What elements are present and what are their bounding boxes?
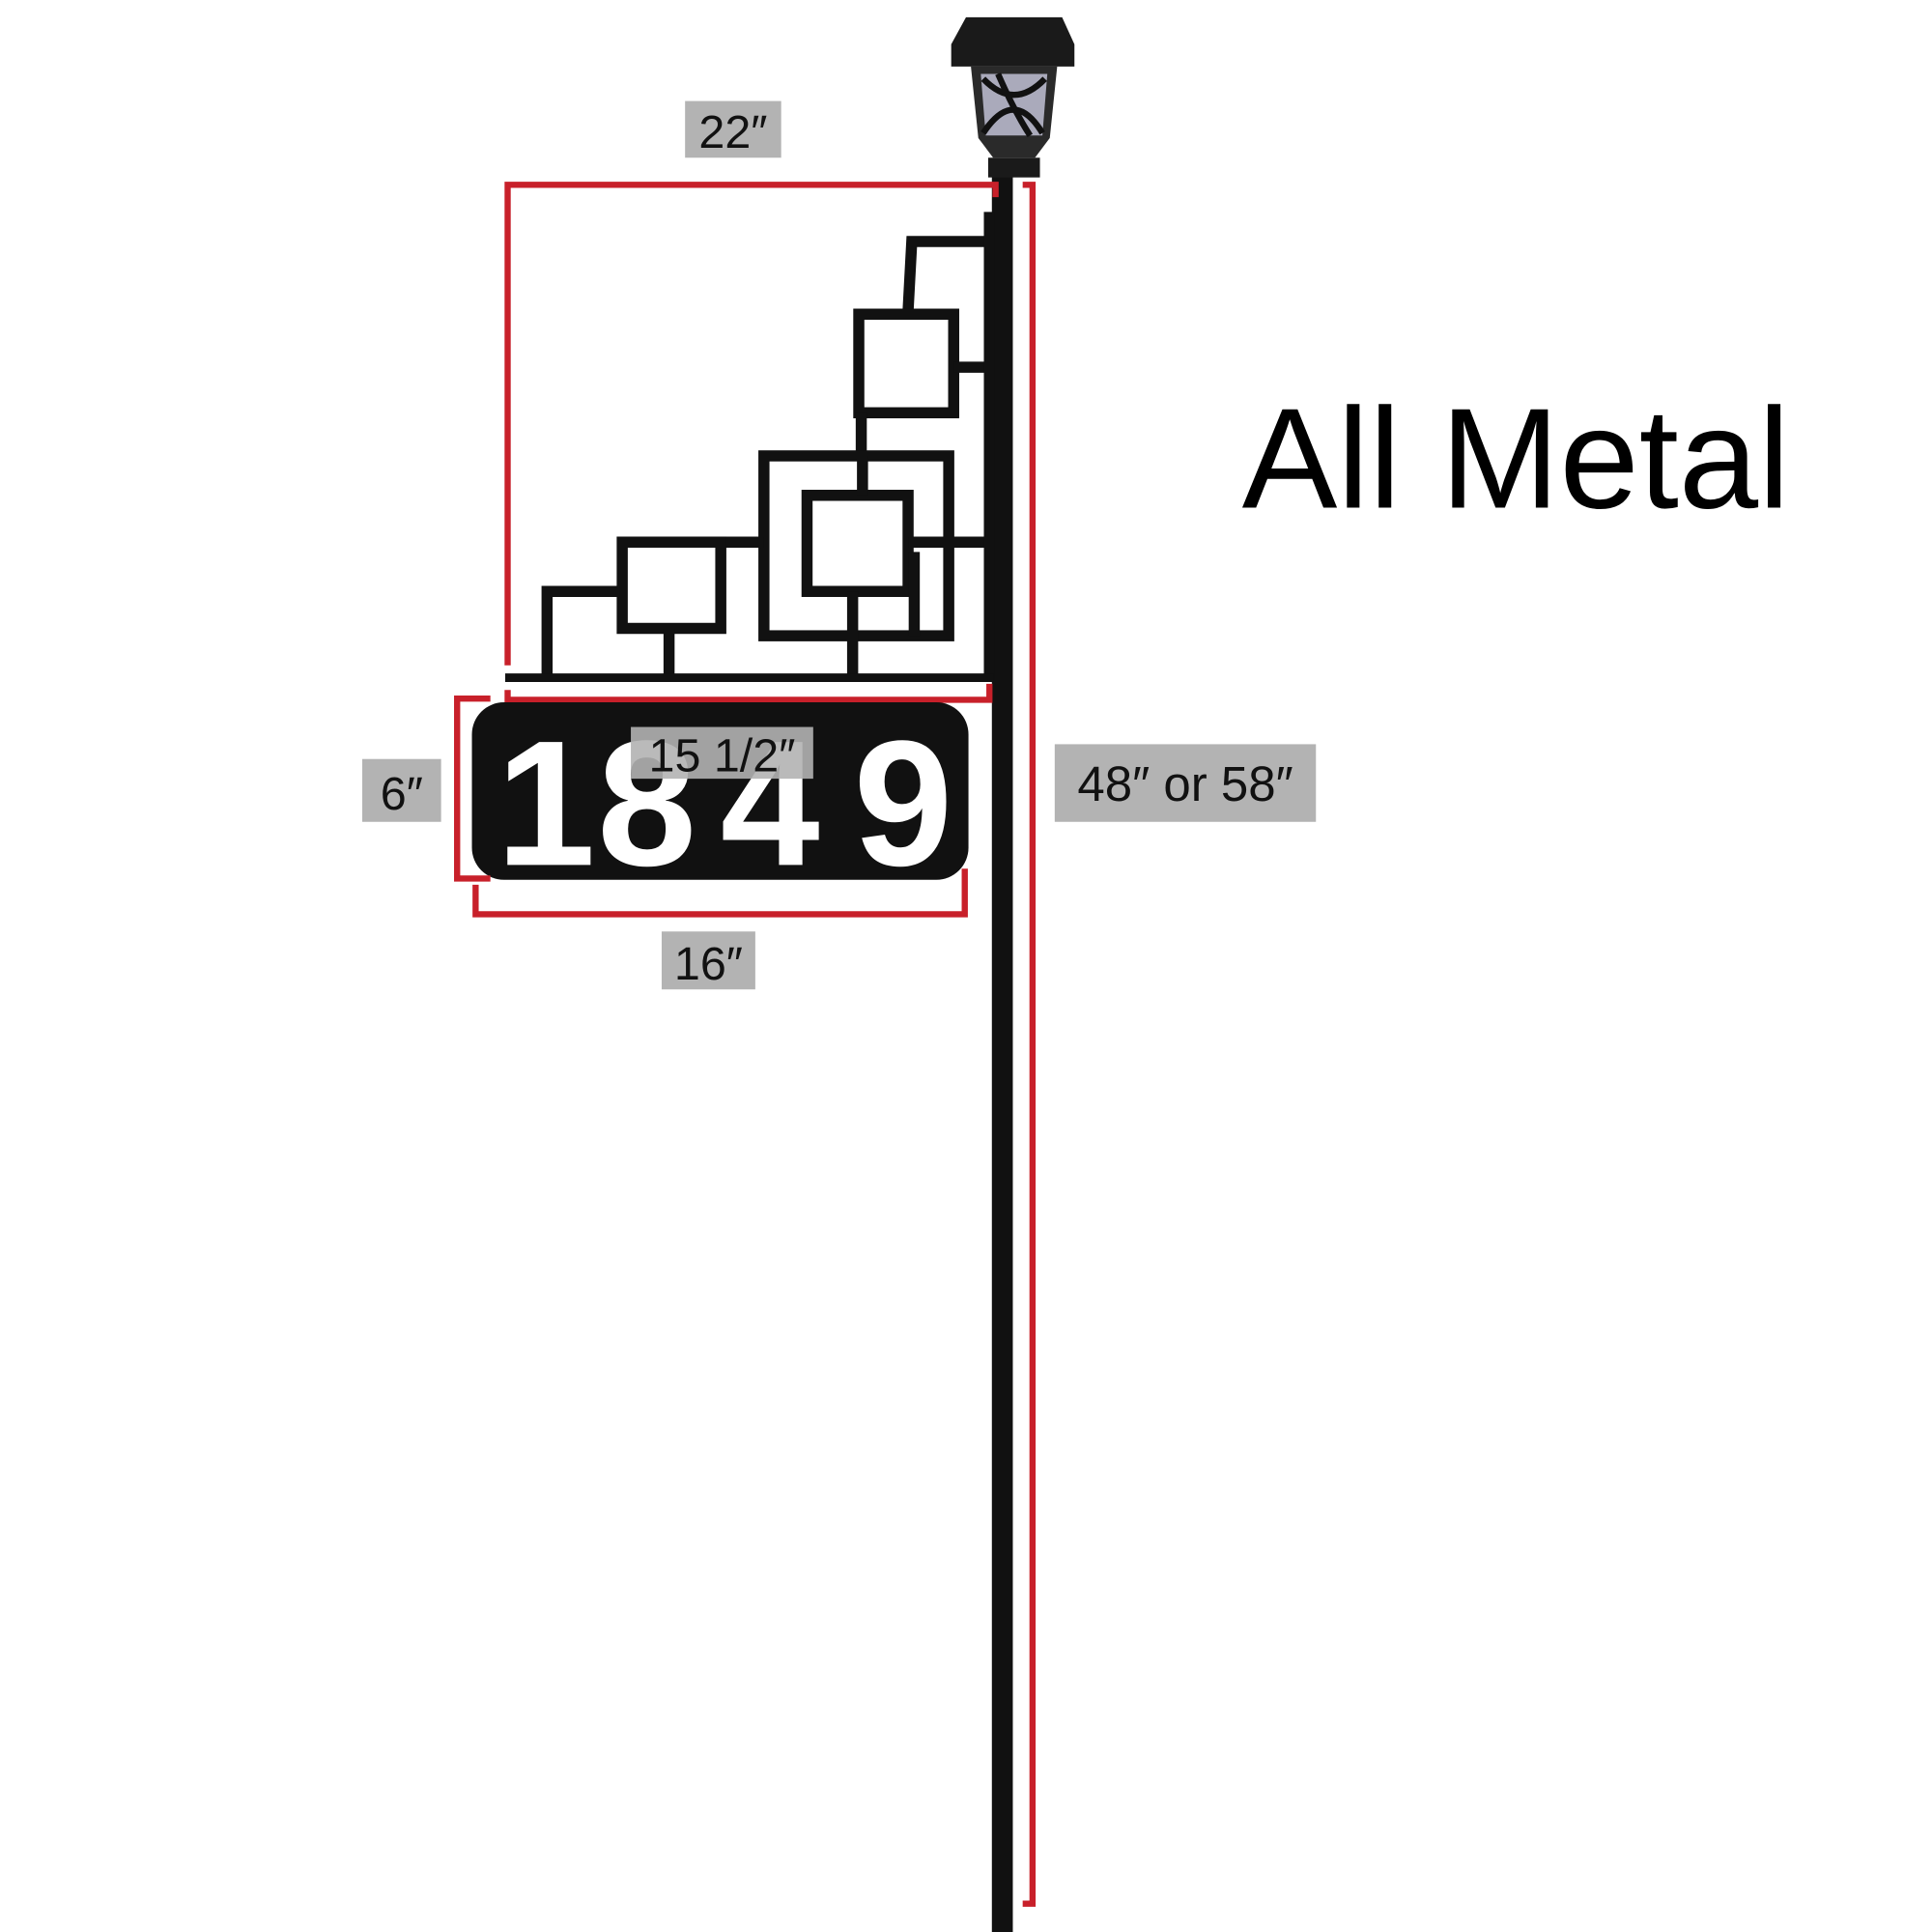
address sign: 1	[497, 704, 595, 903]
address sign: 4	[721, 704, 820, 903]
label: 6	[362, 759, 441, 822]
pole	[992, 173, 1012, 1932]
label: 22	[685, 101, 781, 158]
label: 15 1/2: 15 1/2″	[649, 729, 795, 781]
red bracket: 16	[475, 868, 965, 914]
label: 48 or 58: 48″ or 58″	[1077, 756, 1293, 811]
label: 48 or 58	[1055, 744, 1316, 822]
address sign	[472, 702, 969, 903]
red bracket: 6	[457, 698, 491, 878]
label: 16	[662, 931, 755, 990]
red dimension: 22	[508, 185, 996, 699]
address sign: 9	[854, 704, 952, 903]
title: All Metal: All Metal	[1242, 380, 1790, 539]
frame: geometric squares	[505, 212, 993, 680]
label: 16: 16″	[674, 938, 743, 990]
address sign: 8	[597, 704, 696, 903]
red dimension: pole height	[1023, 185, 1033, 1904]
icon: solar lamp	[952, 17, 1074, 178]
label: 6: 6″	[381, 768, 423, 820]
label: 22: 22″	[698, 106, 767, 158]
